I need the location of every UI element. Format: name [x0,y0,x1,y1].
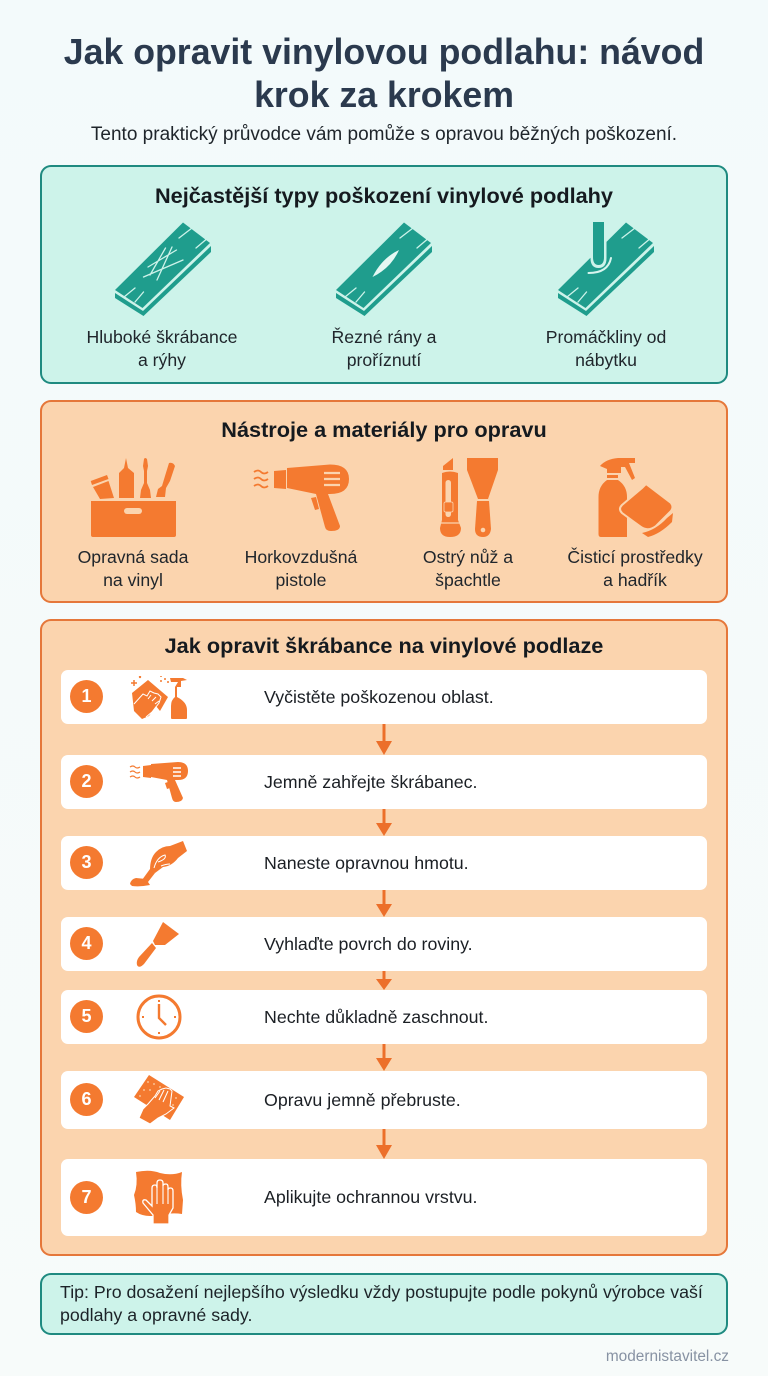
step 1 [61,670,707,724]
arrow 6 [376,1129,392,1159]
icon: heat gun [254,464,349,531]
number 4: 4 [81,933,92,953]
arrow 3 [376,890,392,917]
tip callout [40,1273,728,1335]
caption: dents: nábytku [575,350,637,370]
heading: steps: Jak opravit škrábance na vinylové podlaze [165,633,603,658]
number 3 [70,846,103,879]
text step 2: Jemně zahřejte škrábanec. [264,772,478,792]
caption: cleaner and cloth: Čisticí prostředky [567,547,703,567]
number 3: 3 [81,852,92,872]
number 1 [70,680,103,713]
number 5: 5 [81,1006,92,1026]
text step 7: Aplikujte ochrannou vrstvu. [264,1187,478,1207]
caption: repair kit: Opravná sada [78,547,188,567]
heading: damage types: Nejčastější typy poškození vinylové podlahy [155,183,613,208]
title: Jak opravit vinylovou podlahu: návod [64,32,704,72]
caption: cuts [332,327,436,370]
source credit: modernistavitel.cz [606,1348,729,1365]
caption: repair kit [78,547,188,590]
subtitle: Tento praktický průvodce vám pomůže s opravou běžných poškození. [91,124,677,145]
icon: cleaning [131,676,187,719]
number 1: 1 [81,686,92,706]
title [64,32,704,115]
number 6: 6 [81,1089,92,1109]
number 7: 7 [81,1187,92,1207]
caption: heat gun: pistole [276,570,326,590]
text step 4: Vyhlaďte povrch do roviny. [264,934,473,954]
text step 5: Nechte důkladně zaschnout. [264,1007,488,1027]
step 2 [61,755,707,809]
title: krok za krokem [254,75,514,115]
icon: heat gun [130,762,188,802]
number 2 [70,765,103,798]
icon: sanding [134,1075,184,1124]
icon: cut plank [336,222,432,316]
icon: applying compound [130,841,187,886]
caption: cuts: proříznutí [347,350,421,370]
caption: scratches [86,327,238,370]
number 4 [70,927,103,960]
number 2: 2 [81,771,92,791]
step 5 [61,990,707,1044]
caption: knife and scraper: Ostrý nůž a [423,547,513,567]
step 4 [61,917,707,971]
caption: dents: Promáčkliny od [546,327,666,347]
caption: dents [546,327,666,370]
panel: repair steps [40,619,728,1256]
arrow 2 [376,809,392,836]
caption: cuts: Řezné rány a [332,327,436,347]
step 3 [61,836,707,890]
step 7 [61,1159,707,1236]
icon: clock [136,994,182,1040]
caption: cleaner and cloth [567,547,703,590]
caption: heat gun [245,547,358,590]
icon: knife and scraper [440,458,498,537]
icon: cleaner and cloth [598,458,673,537]
text step 1: Vyčistěte poškozenou oblast. [264,687,494,707]
number 7 [70,1181,103,1214]
arrow 4 [376,971,392,990]
panel: damage types [40,165,728,384]
number 6 [70,1083,103,1116]
icon: scraper [136,922,179,967]
caption: scratches: a rýhy [138,350,186,370]
caption: knife and scraper: špachtle [435,570,501,590]
caption: cleaner and cloth: a hadřík [603,570,667,590]
icon: scratched plank [115,222,211,316]
arrow 1 [376,724,392,755]
tip text: Tip: Pro dosažení nejlepšího výsledku vždy postupujte podle pokynů výrobce vaší podlahy a opravné sady. [60,1282,703,1325]
icon: dented plank [558,222,654,316]
panel: tools and materials [40,400,728,603]
caption: repair kit: na vinyl [103,570,163,590]
icon: protective coat [134,1170,183,1224]
number 5 [70,1000,103,1033]
arrow 5 [376,1044,392,1071]
heading: tools: Nástroje a materiály pro opravu [221,417,547,442]
icon: repair kit [90,458,176,537]
step 6 [61,1071,707,1129]
caption: scratches: Hluboké škrábance [86,327,238,347]
caption: knife and scraper [423,547,514,590]
text step 6: Opravu jemně přebruste. [264,1090,461,1110]
text step 3: Naneste opravnou hmotu. [264,853,469,873]
caption: heat gun: Horkovzdušná [245,547,357,567]
